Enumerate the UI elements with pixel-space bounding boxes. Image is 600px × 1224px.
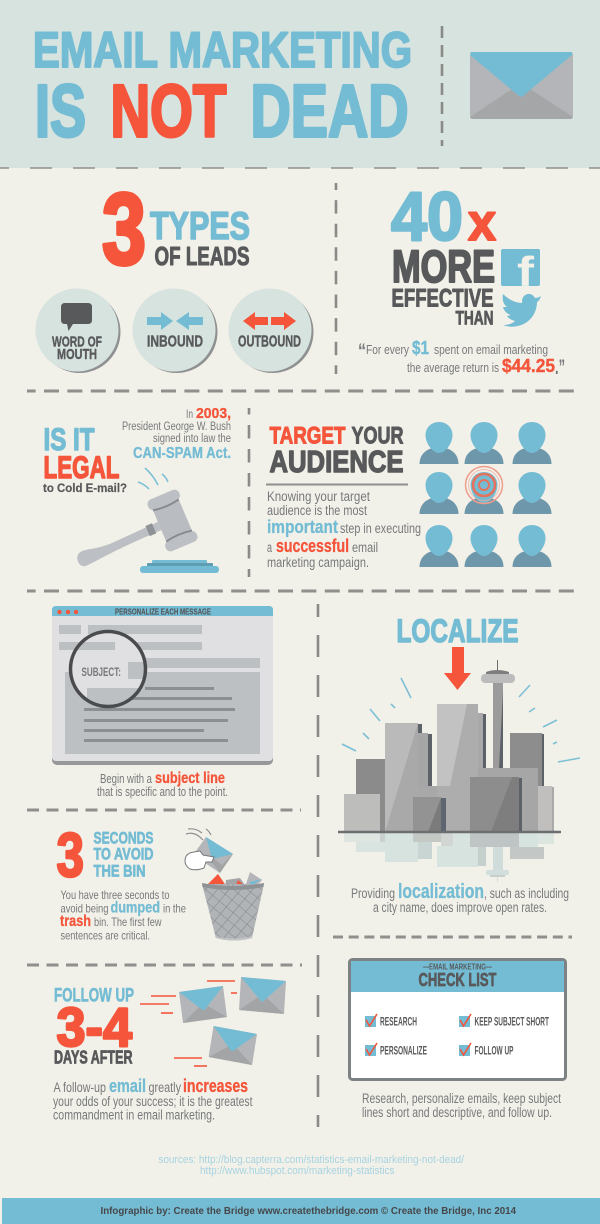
item: follow up: [459, 1043, 514, 1058]
heading: target your audience: AUDIENCE: [270, 445, 404, 479]
panel: localize: [338, 613, 580, 915]
header band: [0, 0, 600, 168]
icon: facebook: f: [517, 248, 535, 295]
heading: 3 seconds to avoid the bin: [56, 822, 154, 890]
circle: word of mouth: [36, 288, 120, 373]
item: follow up: FOLLOW UP: [474, 1046, 514, 1058]
quote: $44.25: [502, 355, 555, 376]
icon: header envelope: [470, 52, 573, 119]
arrow: down to city: [444, 647, 471, 690]
icon: gavel: [67, 468, 219, 587]
heading: 3 types of leads: 3: [102, 174, 146, 286]
quote: spent on email marketing: [434, 343, 548, 357]
heading: 3 seconds to avoid the bin: SECONDS: [94, 828, 154, 848]
item: personalize: [365, 1043, 427, 1058]
stat: 40x: MORE: [392, 241, 495, 292]
icon: twitter bird: [503, 294, 541, 327]
text: target body: step in executing: [340, 521, 421, 536]
circle: outbound: OUTBOUND: [238, 334, 301, 350]
stat: 40x: x: [468, 194, 496, 252]
icon: flying envelopes: [140, 977, 286, 1066]
caption: localization: a city name, does improve open rates.: [373, 900, 547, 915]
text: CAN-SPAM note: In: [186, 409, 193, 421]
circle: inbound: INBOUND: [147, 334, 203, 350]
caption: localization: Providing: [351, 886, 395, 901]
text: target body: important: [267, 517, 338, 537]
text: follow up body: commandment in email marketing.: [53, 1108, 215, 1122]
text: seconds body: sentences are critical.: [60, 928, 150, 942]
reflection: [344, 833, 554, 882]
text: CAN-SPAM note: signed into law the: [153, 433, 231, 445]
panel: is it legal: [43, 405, 231, 587]
title: NOT: [110, 70, 226, 152]
checklist card: CHECK LIST: [418, 970, 497, 990]
stat: 40x: 40: [391, 178, 463, 255]
city skyline: [338, 660, 561, 882]
text: follow up body: A follow-up: [54, 1080, 106, 1095]
checklist card: [350, 960, 566, 1080]
heading: 3 seconds to avoid the bin: TO AVOID: [94, 844, 154, 864]
circle: word of mouth: MOUTH: [57, 346, 97, 363]
text: seconds body: You have three seconds to: [60, 888, 170, 902]
caption: localization: [351, 881, 569, 915]
heading: 3 seconds to avoid the bin: THE BIN: [94, 862, 146, 880]
caption: checklist: [362, 1091, 561, 1120]
quote: For every: [366, 343, 410, 357]
panel: checklist: [350, 960, 566, 1120]
panel: 3 seconds: [56, 822, 264, 942]
heading: follow up 3-4 days after: DAYS AFTER: [54, 1048, 132, 1068]
item: personalize: PERSONALIZE: [380, 1046, 427, 1058]
circle: outbound: [228, 288, 314, 373]
text: follow up body: greatly: [148, 1080, 181, 1095]
heading: 3 types of leads: [102, 174, 250, 286]
caption: subject line: Begin with a: [100, 772, 152, 786]
icon: magnifying glass: SUBJECT:: [82, 667, 121, 679]
text: seconds body: [60, 888, 186, 942]
icon: envelope in hand: [185, 829, 233, 873]
rays: [342, 678, 580, 762]
text: seconds body: trash: [60, 913, 91, 930]
text: target body: email: [352, 540, 378, 555]
item: research: [365, 1014, 417, 1028]
text: target body: a: [267, 540, 272, 555]
text: follow up body: [53, 1076, 253, 1122]
item: keep subject short: [459, 1014, 549, 1028]
caption: subject line: subject line: [155, 770, 225, 787]
heading: follow up 3-4 days after: FOLLOW UP: [54, 986, 134, 1006]
circle: inbound: [132, 288, 218, 373]
heading: is it legal: LEGAL: [44, 449, 120, 485]
title: EMAIL MARKETING: [33, 22, 412, 78]
sources: sources: http://blog.capterra.com/statistics-email-marketing-not-dead/: [158, 1154, 465, 1166]
heading: target your audience: YOUR: [352, 422, 404, 450]
text: target body: audience is the most: [267, 503, 367, 518]
text: follow up body: your odds of your success; it is the greatest: [53, 1094, 253, 1109]
heading: target your audience: TARGET: [270, 422, 346, 450]
text: seconds body: bin. The first few: [94, 915, 162, 929]
title: DEAD: [250, 70, 408, 152]
text: CAN-SPAM note: [122, 405, 231, 462]
text: CAN-SPAM note: 2003,: [196, 405, 231, 422]
caption: localization: , such as including: [484, 886, 569, 901]
panel: follow up: [53, 977, 286, 1122]
text: seconds body: dumped: [110, 900, 160, 916]
circle: word of mouth: WORD OF: [52, 334, 102, 350]
heading: is it legal: IS IT: [44, 421, 94, 457]
text: seconds body: avoid being: [60, 902, 108, 916]
heading: follow up 3-4 days after: 3-4: [56, 996, 132, 1058]
panel: personalize window: [52, 606, 273, 799]
text: follow up body: email: [109, 1076, 146, 1096]
footer bar: Infographic by: Create the Bridge www.createthebridge.com © Create the Bridge, Inc 2014: [100, 1205, 516, 1217]
sources: http://www.hubspot.com/marketing-statistics: [200, 1165, 395, 1177]
caption: subject line: that is specific and to the point.: [97, 785, 228, 799]
browser window: PERSONALIZE EACH MESSAGE: [115, 606, 211, 616]
heading: is it legal: to Cold E-mail?: [43, 481, 127, 495]
stat: 40x: [391, 178, 496, 330]
heading: localize: LOCALIZE: [396, 613, 518, 649]
title: [33, 22, 412, 152]
quote: the average return is: [407, 361, 499, 375]
text: seconds body: in the: [163, 902, 186, 916]
heading: target your audience: [270, 422, 404, 479]
tower: [481, 660, 515, 769]
panel: 40x more effective: [358, 178, 565, 379]
text: target body: marketing campaign.: [267, 555, 369, 570]
icon: magnifying glass: [60, 632, 148, 708]
caption: subject line: [97, 770, 228, 799]
text: target body: [267, 489, 421, 570]
sources: [158, 1154, 465, 1177]
footer bar: [2, 1198, 600, 1224]
heading: 3 seconds to avoid the bin: 3: [56, 822, 84, 890]
item: research: RESEARCH: [380, 1016, 417, 1028]
text: target body: successful: [276, 536, 349, 556]
icon: facebook: [501, 248, 540, 295]
heading: 3 types of leads: TYPES: [150, 205, 250, 248]
text: target body: Knowing your target: [267, 489, 370, 504]
icon: target rings: [466, 466, 502, 504]
quote: .”: [555, 356, 565, 379]
heading: is it legal: [43, 421, 127, 495]
text: CAN-SPAM note: President George W. Bush: [122, 421, 231, 433]
text: CAN-SPAM note: CAN-SPAM Act.: [133, 445, 231, 462]
caption: localization: localization: [398, 881, 484, 903]
quote: “: [358, 340, 366, 363]
quote: $1: [412, 337, 429, 358]
icon: trash bin: [202, 872, 264, 940]
browser window: [52, 606, 273, 765]
quote: [358, 337, 565, 379]
title: IS: [35, 70, 86, 152]
panel: target your audience: [266, 422, 552, 570]
panel: 3 types of leads: [36, 174, 314, 373]
stat: 40x: THAN: [456, 308, 494, 330]
stat: 40x: EFFECTIVE: [392, 284, 494, 312]
text: follow up body: increases: [183, 1076, 248, 1096]
people grid: [420, 422, 552, 567]
checklist card: —EMAIL MARKETING—: [423, 962, 492, 972]
heading: 3 types of leads: OF LEADS: [154, 241, 250, 271]
